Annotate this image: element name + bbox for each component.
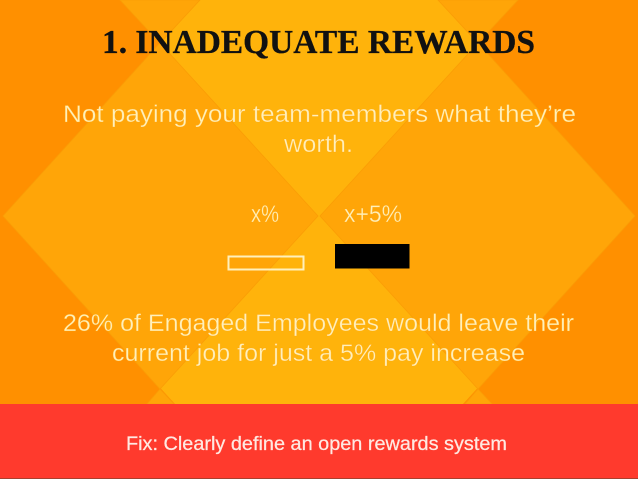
statistic text: 26% of Engaged Employees would leave their xyxy=(63,310,574,337)
bar: x+5% solid xyxy=(335,244,410,268)
intro text xyxy=(63,101,576,158)
statistic text: current job for just a 5% pay increase xyxy=(112,340,525,367)
statistic text xyxy=(63,310,574,367)
label: x+5%: x+5% xyxy=(344,201,402,228)
title: 1. INADEQUATE REWARDS xyxy=(102,24,535,61)
label: x%: x% xyxy=(251,201,279,228)
intro text: Not paying your team-members what they’re xyxy=(63,101,576,128)
fix text: Fix: Clearly define an open rewards system xyxy=(126,433,507,455)
fix banner xyxy=(0,404,638,479)
bar: x% hollow xyxy=(228,256,304,270)
chart: pay comparison xyxy=(228,201,410,270)
intro text: worth. xyxy=(283,131,353,158)
